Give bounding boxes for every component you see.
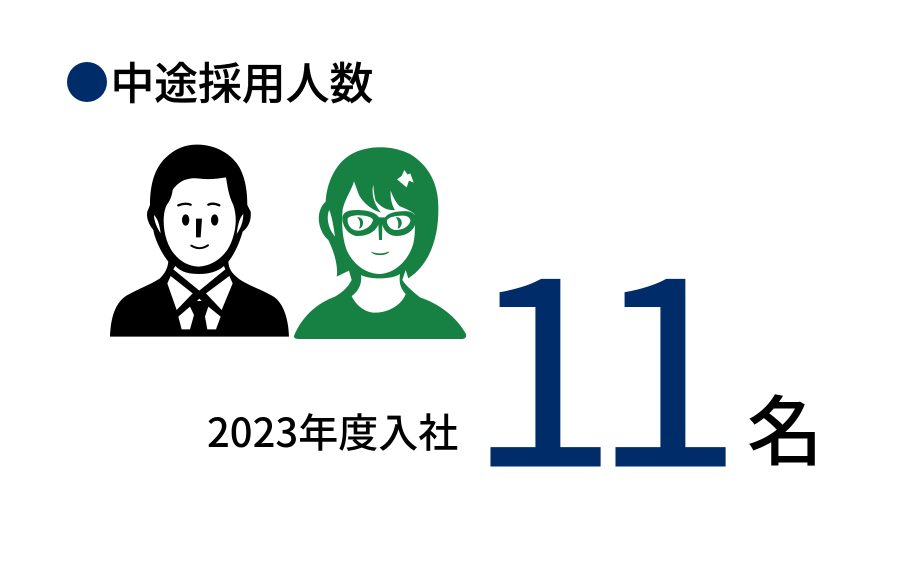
eyes xyxy=(357,217,363,229)
mouth xyxy=(371,251,389,255)
icon: woman with glasses xyxy=(294,147,466,339)
nose xyxy=(378,223,382,240)
mouth xyxy=(191,245,208,248)
digit 1: 1 xyxy=(591,170,743,541)
unit: people: 名 xyxy=(747,371,823,481)
neck xyxy=(352,274,406,313)
shirt collar xyxy=(167,276,193,310)
digit 1: 1 xyxy=(466,170,618,541)
ear xyxy=(328,210,335,237)
eyes xyxy=(182,214,189,226)
label: joined in fiscal 2023: 2023年度入社 xyxy=(207,401,458,459)
heading bullet xyxy=(67,62,107,102)
heading text: 中途採用人数 xyxy=(110,48,373,112)
face xyxy=(342,181,415,274)
hair clip xyxy=(397,170,414,187)
neck xyxy=(173,266,225,291)
glasses xyxy=(342,210,416,236)
nose xyxy=(196,219,202,237)
eyebrows xyxy=(178,204,219,205)
heading: mid-career hires xyxy=(67,48,373,112)
big number: 11 xyxy=(466,170,743,541)
icon: man in suit xyxy=(110,145,289,337)
